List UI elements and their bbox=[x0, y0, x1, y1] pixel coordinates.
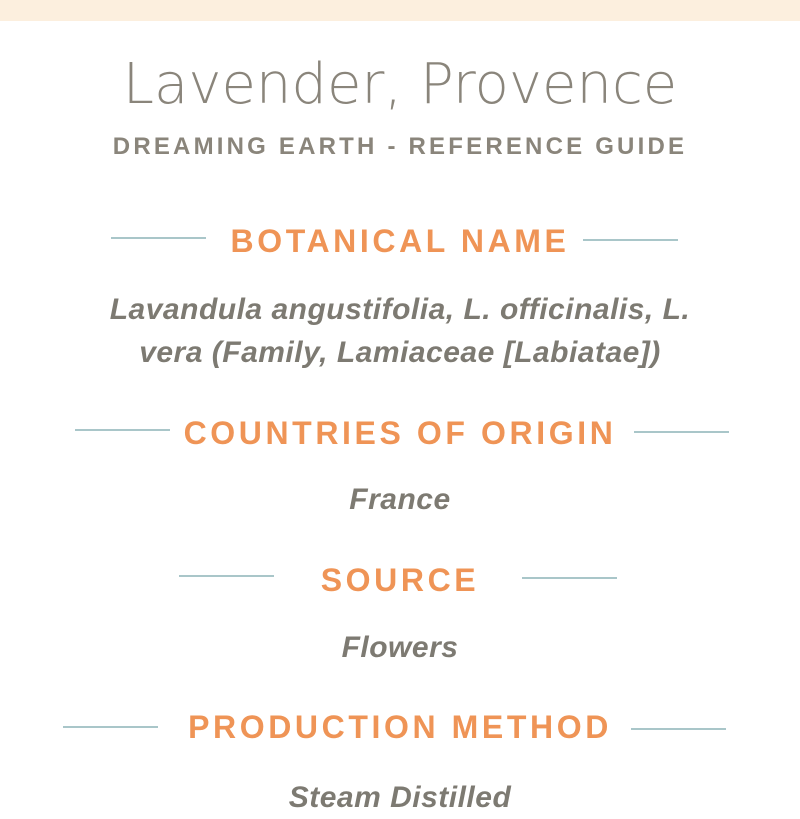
section: production method bbox=[63, 709, 726, 814]
section: botanical name bbox=[110, 223, 690, 369]
section: countries of origin bbox=[75, 415, 729, 516]
text: botanical name bbox=[110, 293, 690, 369]
top band bbox=[0, 0, 800, 21]
subtitle: DREAMING EARTH - REFERENCE GUIDE bbox=[113, 133, 687, 160]
section: source bbox=[179, 562, 617, 664]
heading: production method: PRODUCTION METHOD bbox=[188, 709, 612, 745]
heading: botanical name: BOTANICAL NAME bbox=[230, 223, 569, 259]
text: botanical name: Lavandula angustifolia, L. officinalis, L. bbox=[110, 293, 690, 326]
text: Steam Distilled: Steam Distilled bbox=[289, 781, 511, 814]
text: France: France bbox=[349, 483, 451, 516]
text: Flowers: Flowers bbox=[342, 631, 458, 664]
title: Lavender, Provence bbox=[123, 52, 677, 117]
text: botanical name: vera (Family, Lamiaceae [Labiatae]) bbox=[139, 336, 661, 369]
heading: source: SOURCE bbox=[321, 562, 479, 598]
heading: countries of origin: COUNTRIES OF ORIGIN bbox=[184, 415, 616, 451]
